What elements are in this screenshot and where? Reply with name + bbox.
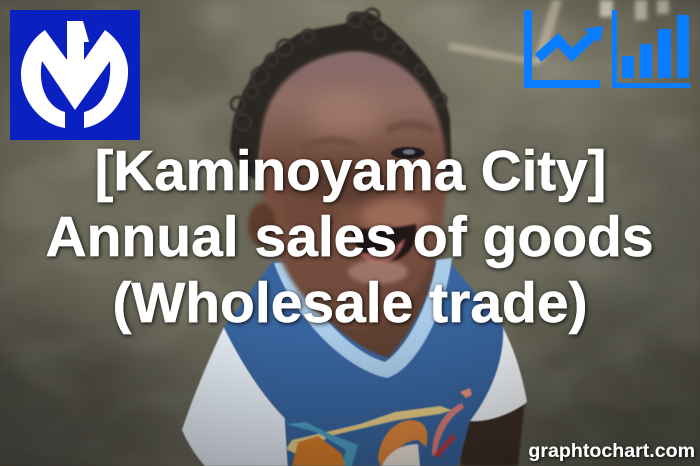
chin xyxy=(348,260,408,284)
title: Annual sales of goods xyxy=(45,205,654,269)
neck xyxy=(292,260,436,358)
curls xyxy=(231,9,446,130)
collar xyxy=(274,258,452,378)
site name: graphtochart.com xyxy=(528,440,695,462)
icon: line chart with rising arrow xyxy=(524,10,603,88)
cheek xyxy=(361,199,429,231)
tongue xyxy=(358,238,405,266)
shirt xyxy=(224,260,503,466)
shirt print xyxy=(286,388,472,466)
shadow under eye xyxy=(285,167,395,203)
title: [Kaminoyama City] xyxy=(95,139,606,202)
eye xyxy=(391,147,425,159)
title: (Wholesale trade) xyxy=(112,271,588,335)
sleeve left xyxy=(182,327,288,466)
logo: blue square with white emblem xyxy=(10,10,140,140)
icon: bar chart xyxy=(612,10,690,88)
mouth xyxy=(350,224,416,263)
face xyxy=(260,52,446,329)
ear xyxy=(248,203,276,247)
brow xyxy=(300,137,362,150)
distant blurred posts xyxy=(448,0,669,66)
arm right xyxy=(460,400,525,466)
sleeve right xyxy=(468,326,527,421)
title xyxy=(45,139,654,335)
forehead highlight xyxy=(307,93,383,137)
hair xyxy=(230,9,452,180)
